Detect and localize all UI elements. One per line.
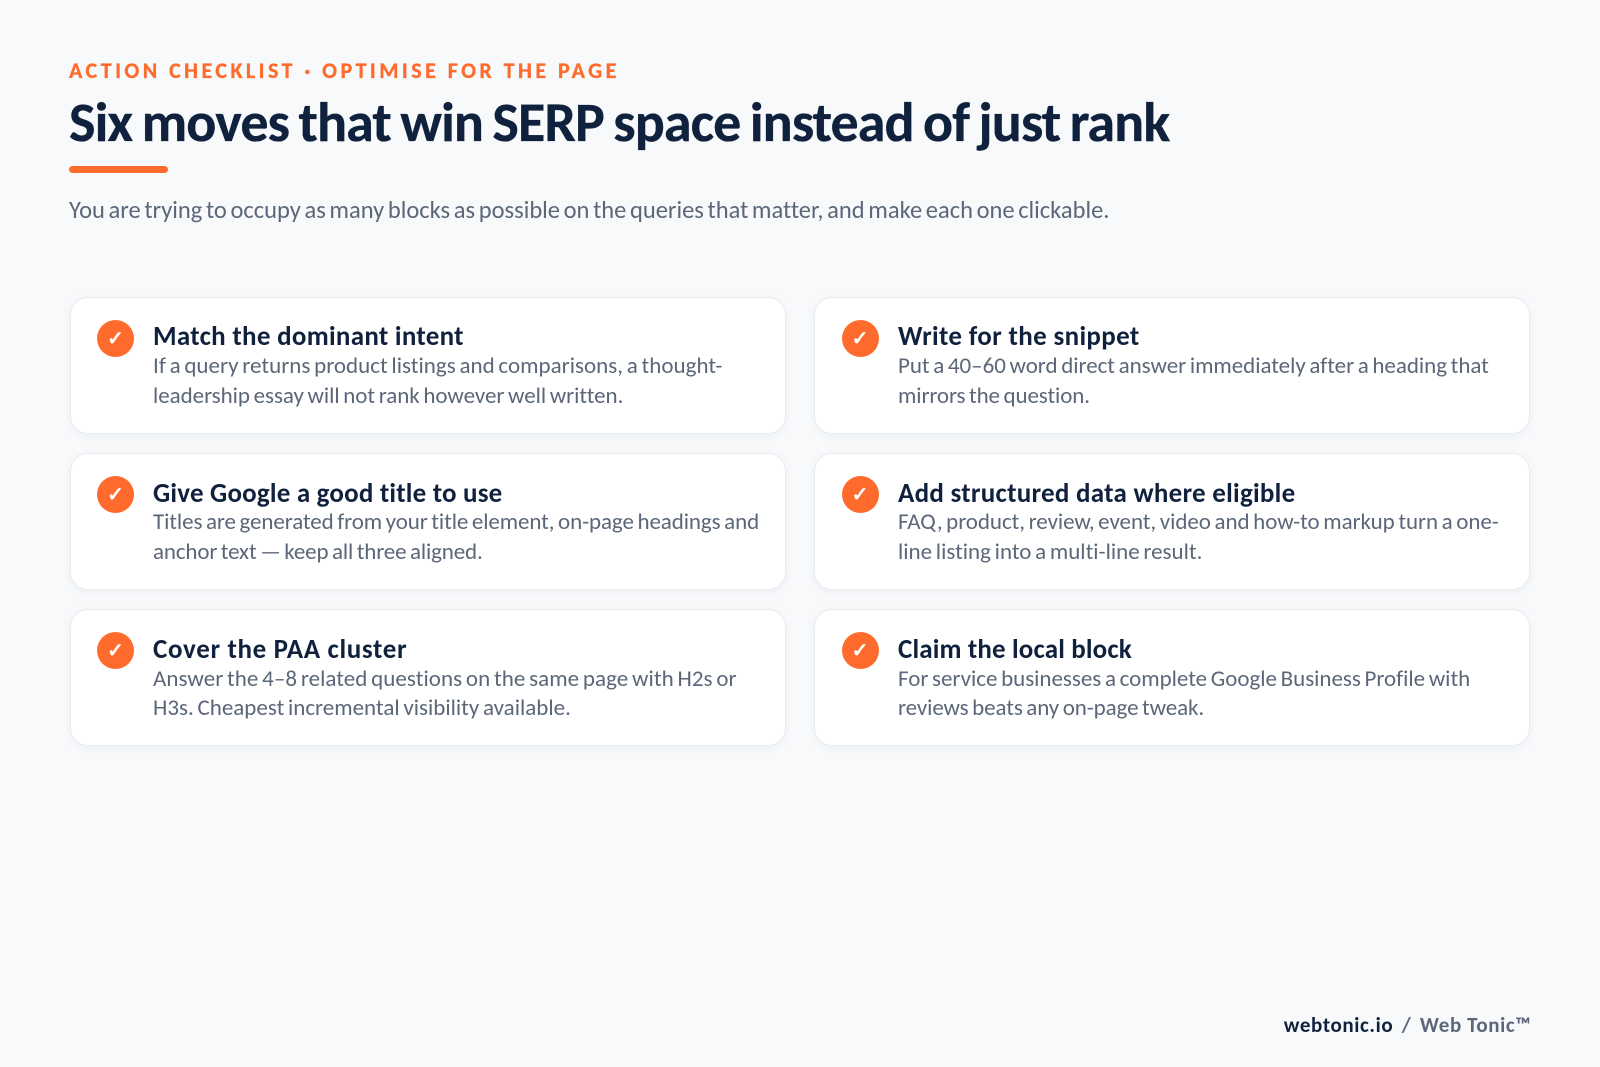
icon: check: ✓: [107, 482, 124, 506]
card heading: Add structured data where eligible: [898, 477, 1295, 510]
icon: check: [842, 632, 878, 669]
icon: check: ✓: [107, 326, 124, 350]
icon: check: ✓: [852, 638, 868, 662]
icon: check: ✓: [107, 638, 124, 662]
panel: add structured data: [814, 453, 1530, 590]
subtitle: You are trying to occupy as many blocks as possible on the queries that matter, and make each one clickable.: [69, 195, 1110, 225]
icon: check: [842, 476, 878, 513]
card text: [898, 665, 1470, 722]
card text: Answer the 4–8 related questions on the same page with H2s or: [153, 665, 737, 693]
icon: check: [97, 320, 134, 357]
icon: check: [97, 476, 134, 513]
panel: write for the snippet: [814, 297, 1530, 434]
card text: [153, 352, 722, 410]
card text: If a query returns product listings and comparisons, a thought-: [153, 352, 722, 380]
panel: cover the paa cluster: [70, 609, 786, 746]
card text: leadership essay will not rank however well written.: [153, 382, 623, 410]
card text: [898, 352, 1489, 410]
title: Six moves that win SERP space instead of just rank: [69, 89, 1169, 157]
footer brand: webtonic.io / Web Tonic™: [1284, 1012, 1531, 1038]
eyebrow heading: ACTION CHECKLIST · OPTIMISE FOR THE PAGE: [69, 57, 620, 84]
card text: Titles are generated from your title element, on-page headings and: [153, 508, 759, 536]
card text: [153, 508, 759, 566]
card heading: Cover the PAA cluster: [153, 633, 407, 666]
card text: [153, 665, 737, 722]
icon: check: ✓: [852, 326, 868, 350]
card text: reviews beats any on-page tweak.: [898, 694, 1204, 722]
panel: give google a good title: [70, 453, 786, 590]
icon: check: ✓: [852, 482, 868, 506]
card heading: Give Google a good title to use: [153, 477, 502, 510]
card heading: Claim the local block: [898, 633, 1132, 666]
icon: check: [97, 632, 134, 669]
panel: match the dominant intent: [70, 297, 786, 434]
card text: line listing into a multi-line result.: [898, 538, 1202, 566]
card text: mirrors the question.: [898, 382, 1090, 410]
card text: For service businesses a complete Google Business Profile with: [898, 665, 1470, 693]
card heading: Write for the snippet: [898, 320, 1140, 353]
card heading: Match the dominant intent: [153, 320, 464, 353]
card text: FAQ, product, review, event, video and how-to markup turn a one-: [898, 508, 1499, 536]
card text: H3s. Cheapest incremental visibility available.: [153, 694, 571, 722]
panel: claim the local block: [814, 609, 1530, 746]
icon: check: [842, 320, 878, 357]
card text: Put a 40–60 word direct answer immediately after a heading that: [898, 352, 1489, 380]
card text: anchor text — keep all three aligned.: [153, 538, 483, 566]
card text: [898, 508, 1499, 566]
accent rule: [69, 166, 168, 173]
